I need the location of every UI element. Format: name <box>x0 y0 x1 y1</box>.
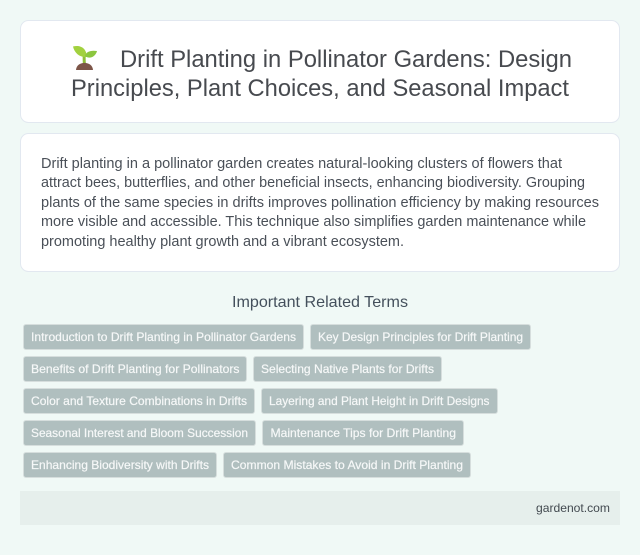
tag: Maintenance Tips for Drift Planting <box>270 426 456 440</box>
description text: plants of the same species in drifts improves pollination efficiency by making resources <box>41 195 599 211</box>
tag: Common Mistakes to Avoid in Drift Planting <box>231 458 463 472</box>
footer <box>20 491 620 525</box>
tag <box>262 420 464 446</box>
tag: Key Design Principles for Drift Planting <box>318 330 523 344</box>
tag <box>24 388 254 414</box>
tag: Seasonal Interest and Bloom Succession <box>31 426 248 440</box>
description text <box>41 156 599 250</box>
tag <box>24 356 246 382</box>
description text: Drift planting in a pollinator garden creates natural-looking clusters of flowers that <box>41 156 562 172</box>
icon: seedling <box>73 46 97 70</box>
tag <box>310 324 530 350</box>
description text: promoting healthy plant growth and a vibrant ecosystem. <box>41 234 404 250</box>
description text: attract bees, butterflies, and other beneficial insects, enhancing biodiversity. Grouping <box>41 175 585 191</box>
tag <box>254 356 442 382</box>
tag list <box>24 324 530 478</box>
title text: Principles, Plant Choices, and Seasonal Impact <box>71 75 569 102</box>
tag: Selecting Native Plants for Drifts <box>261 362 434 376</box>
tag <box>24 420 256 446</box>
description text: more visible and accessible. This technique also simplifies garden maintenance while <box>41 214 586 230</box>
tag: Benefits of Drift Planting for Pollinators <box>31 362 240 376</box>
tag <box>24 324 304 350</box>
tag: Introduction to Drift Planting in Pollinator Gardens <box>31 330 296 344</box>
tag: Enhancing Biodiversity with Drifts <box>31 458 209 472</box>
tag <box>224 452 470 478</box>
tag: Color and Texture Combinations in Drifts <box>31 394 247 408</box>
panel: title header <box>20 20 620 122</box>
tag: Layering and Plant Height in Drift Designs <box>269 394 490 408</box>
panel: description <box>20 134 620 272</box>
heading: important related terms: Important Related Terms <box>232 294 408 311</box>
title text: Drift Planting in Pollinator Gardens: Design <box>120 46 572 73</box>
tag <box>24 452 216 478</box>
footer source text: gardenot.com <box>536 501 610 515</box>
title text <box>71 46 572 102</box>
tag <box>262 388 498 414</box>
